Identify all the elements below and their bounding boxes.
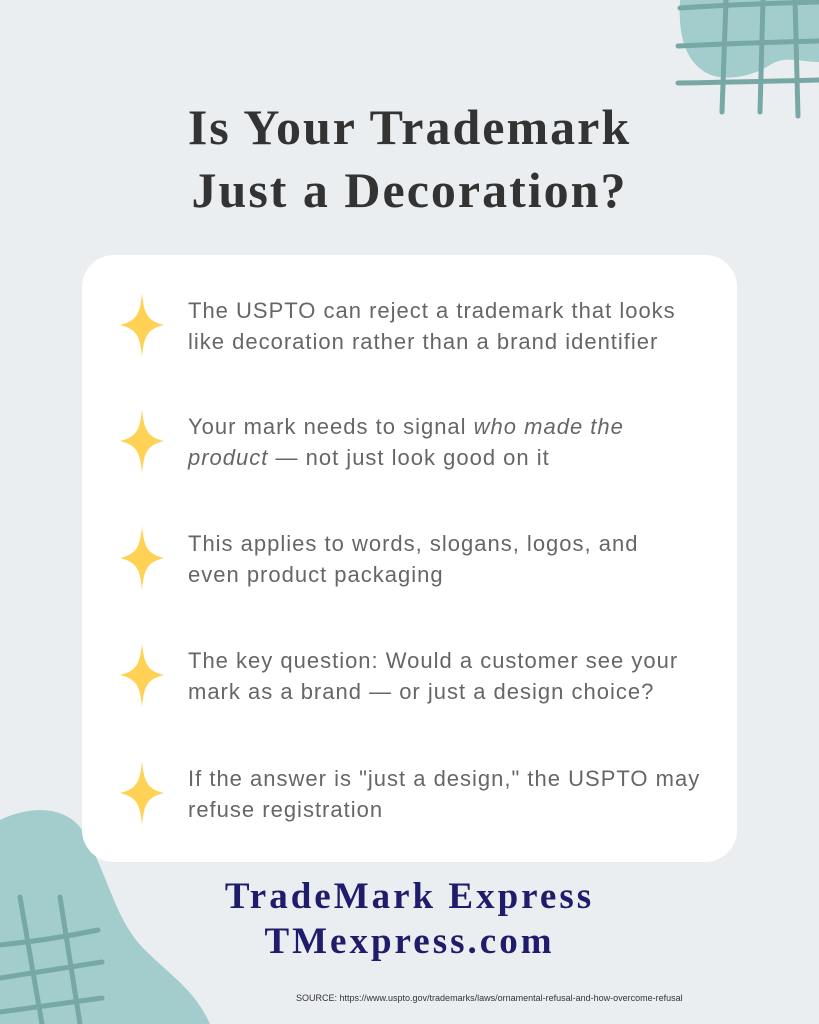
title: Is Your Trademark — [188, 99, 631, 155]
source note: SOURCE: https://www.uspto.gov/trademarks/laws/ornamental-refusal-and-how-overcome-refusal — [296, 993, 683, 1003]
point 4 — [120, 644, 678, 707]
panel: key points card — [82, 255, 737, 862]
point 4: The key question: Would a customer see your — [188, 648, 678, 673]
decoration: top-right blob with grid — [676, 0, 819, 118]
point 3 — [120, 526, 638, 590]
footer brand: TMexpress.com — [264, 921, 555, 962]
point 5: If the answer is "just a design," the USPTO may — [188, 766, 700, 791]
point 1 — [120, 294, 676, 357]
title: Just a Decoration? — [192, 162, 627, 218]
point 3: This applies to words, slogans, logos, and — [188, 531, 638, 556]
point 4: mark as a brand — or just a design choice? — [188, 679, 654, 704]
footer brand — [225, 876, 594, 962]
point 5: refuse registration — [188, 797, 383, 822]
title — [188, 99, 631, 218]
point 1: The USPTO can reject a trademark that looks — [188, 298, 676, 323]
point 2 — [120, 410, 624, 473]
decoration: bottom-left blob with grid — [0, 810, 210, 1024]
point 2: Your mark needs to signal who made the — [188, 414, 624, 439]
point 3: even product packaging — [188, 562, 444, 587]
footer brand: TradeMark Express — [225, 876, 594, 917]
point 5 — [120, 761, 700, 825]
point 2: product — not just look good on it — [188, 445, 550, 470]
point 1: like decoration rather than a brand identifier — [188, 329, 658, 354]
